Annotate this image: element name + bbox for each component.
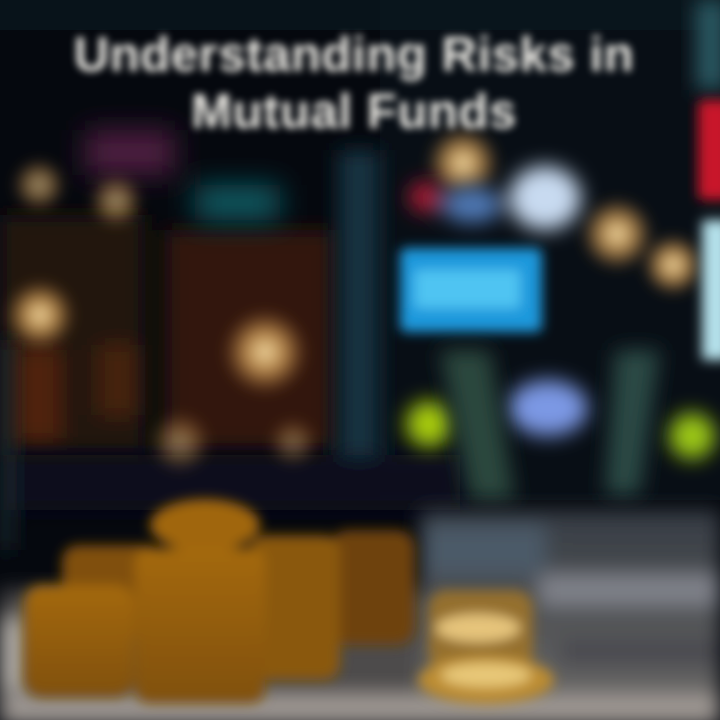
teal columns: [440, 350, 660, 500]
coin stacks: [24, 499, 415, 703]
top right sign: [696, 0, 720, 90]
cyan billboard: [400, 248, 542, 332]
dark blue pillar and base strip: [0, 150, 460, 550]
title: [70, 28, 638, 139]
neon signs: [85, 130, 280, 220]
title: Understanding Risks in: [74, 28, 634, 82]
lamps left: [4, 157, 319, 474]
right edge signs: [698, 100, 720, 360]
title: Mutual Funds: [191, 85, 517, 139]
brown storefront panels: [0, 215, 335, 455]
small signs: [406, 166, 715, 459]
table surface: [0, 510, 720, 720]
lamps right: [425, 125, 705, 297]
glowing coin stack: [418, 590, 554, 704]
